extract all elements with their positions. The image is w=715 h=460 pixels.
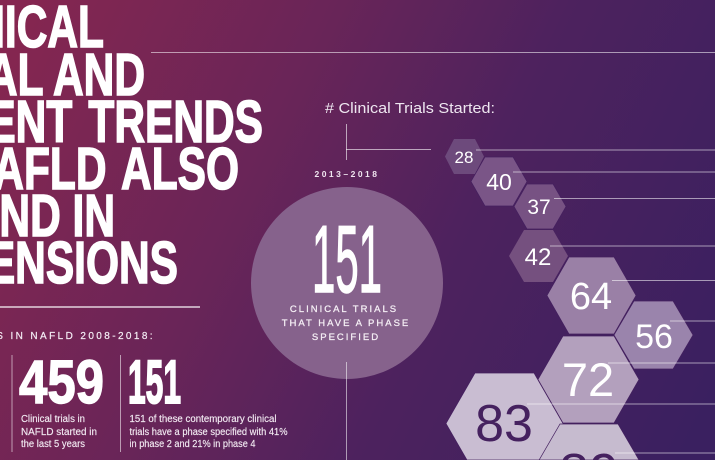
hexagon: 40: 40 <box>486 169 512 195</box>
circle: 151 clinical trials: 151 <box>312 206 382 313</box>
circle: 151 clinical trials <box>251 187 443 379</box>
hexagon: 56 <box>614 301 693 369</box>
hexagon: 42: 42 <box>525 244 551 271</box>
hexagon: 42 <box>509 230 568 282</box>
circle caption: THAT HAVE A PHASE <box>282 318 410 329</box>
hexagon: 89 <box>531 424 639 460</box>
hexagon: 56: 56 <box>635 318 673 356</box>
stat: 151 with phase <box>128 348 288 450</box>
connector bracket <box>346 124 431 160</box>
stat: 459 trials: NAFLD started in <box>21 427 97 438</box>
stat: 151 with phase: 151 <box>128 348 181 416</box>
date range label: 2013–2018 <box>314 169 380 179</box>
hexagon: 72 <box>538 336 639 423</box>
stat: 459 trials: Clinical trials in <box>21 414 85 425</box>
hexagon: 28 <box>445 139 484 174</box>
hexagon: 37: 37 <box>527 196 551 219</box>
heading: clinical trials started: # Clinical Trials Started: <box>325 100 495 117</box>
stat: 151 with phase: trials have a phase specified with 41% <box>130 427 288 438</box>
stat: 151 with phase: in phase 2 and 21% in phase 4 <box>130 439 256 450</box>
stat: 151 with phase: 151 of these contemporary clinical <box>130 414 276 425</box>
hexagon: 83 <box>446 373 563 460</box>
vertical connector below circle <box>346 362 348 460</box>
hexagon: 40 <box>471 157 527 206</box>
circle caption: SPECIFIED <box>312 332 380 343</box>
hexagon leader lines <box>476 150 715 453</box>
circle caption: CLINICAL TRIALS <box>290 304 398 315</box>
circle caption <box>282 304 410 343</box>
stat: 459 trials <box>19 348 104 450</box>
hexagon: 83: 83 <box>475 395 533 453</box>
stat: 459 trials: 459 <box>19 348 104 416</box>
hexagon: 72: 72 <box>562 353 614 406</box>
hexagon: 37 <box>514 184 566 229</box>
stat: 459 trials: the last 5 years <box>21 439 85 450</box>
hexagon: 64: 64 <box>570 276 612 318</box>
hexagon: 28: 28 <box>455 148 473 167</box>
title <box>0 0 263 296</box>
hexagon: 64 <box>547 257 636 334</box>
